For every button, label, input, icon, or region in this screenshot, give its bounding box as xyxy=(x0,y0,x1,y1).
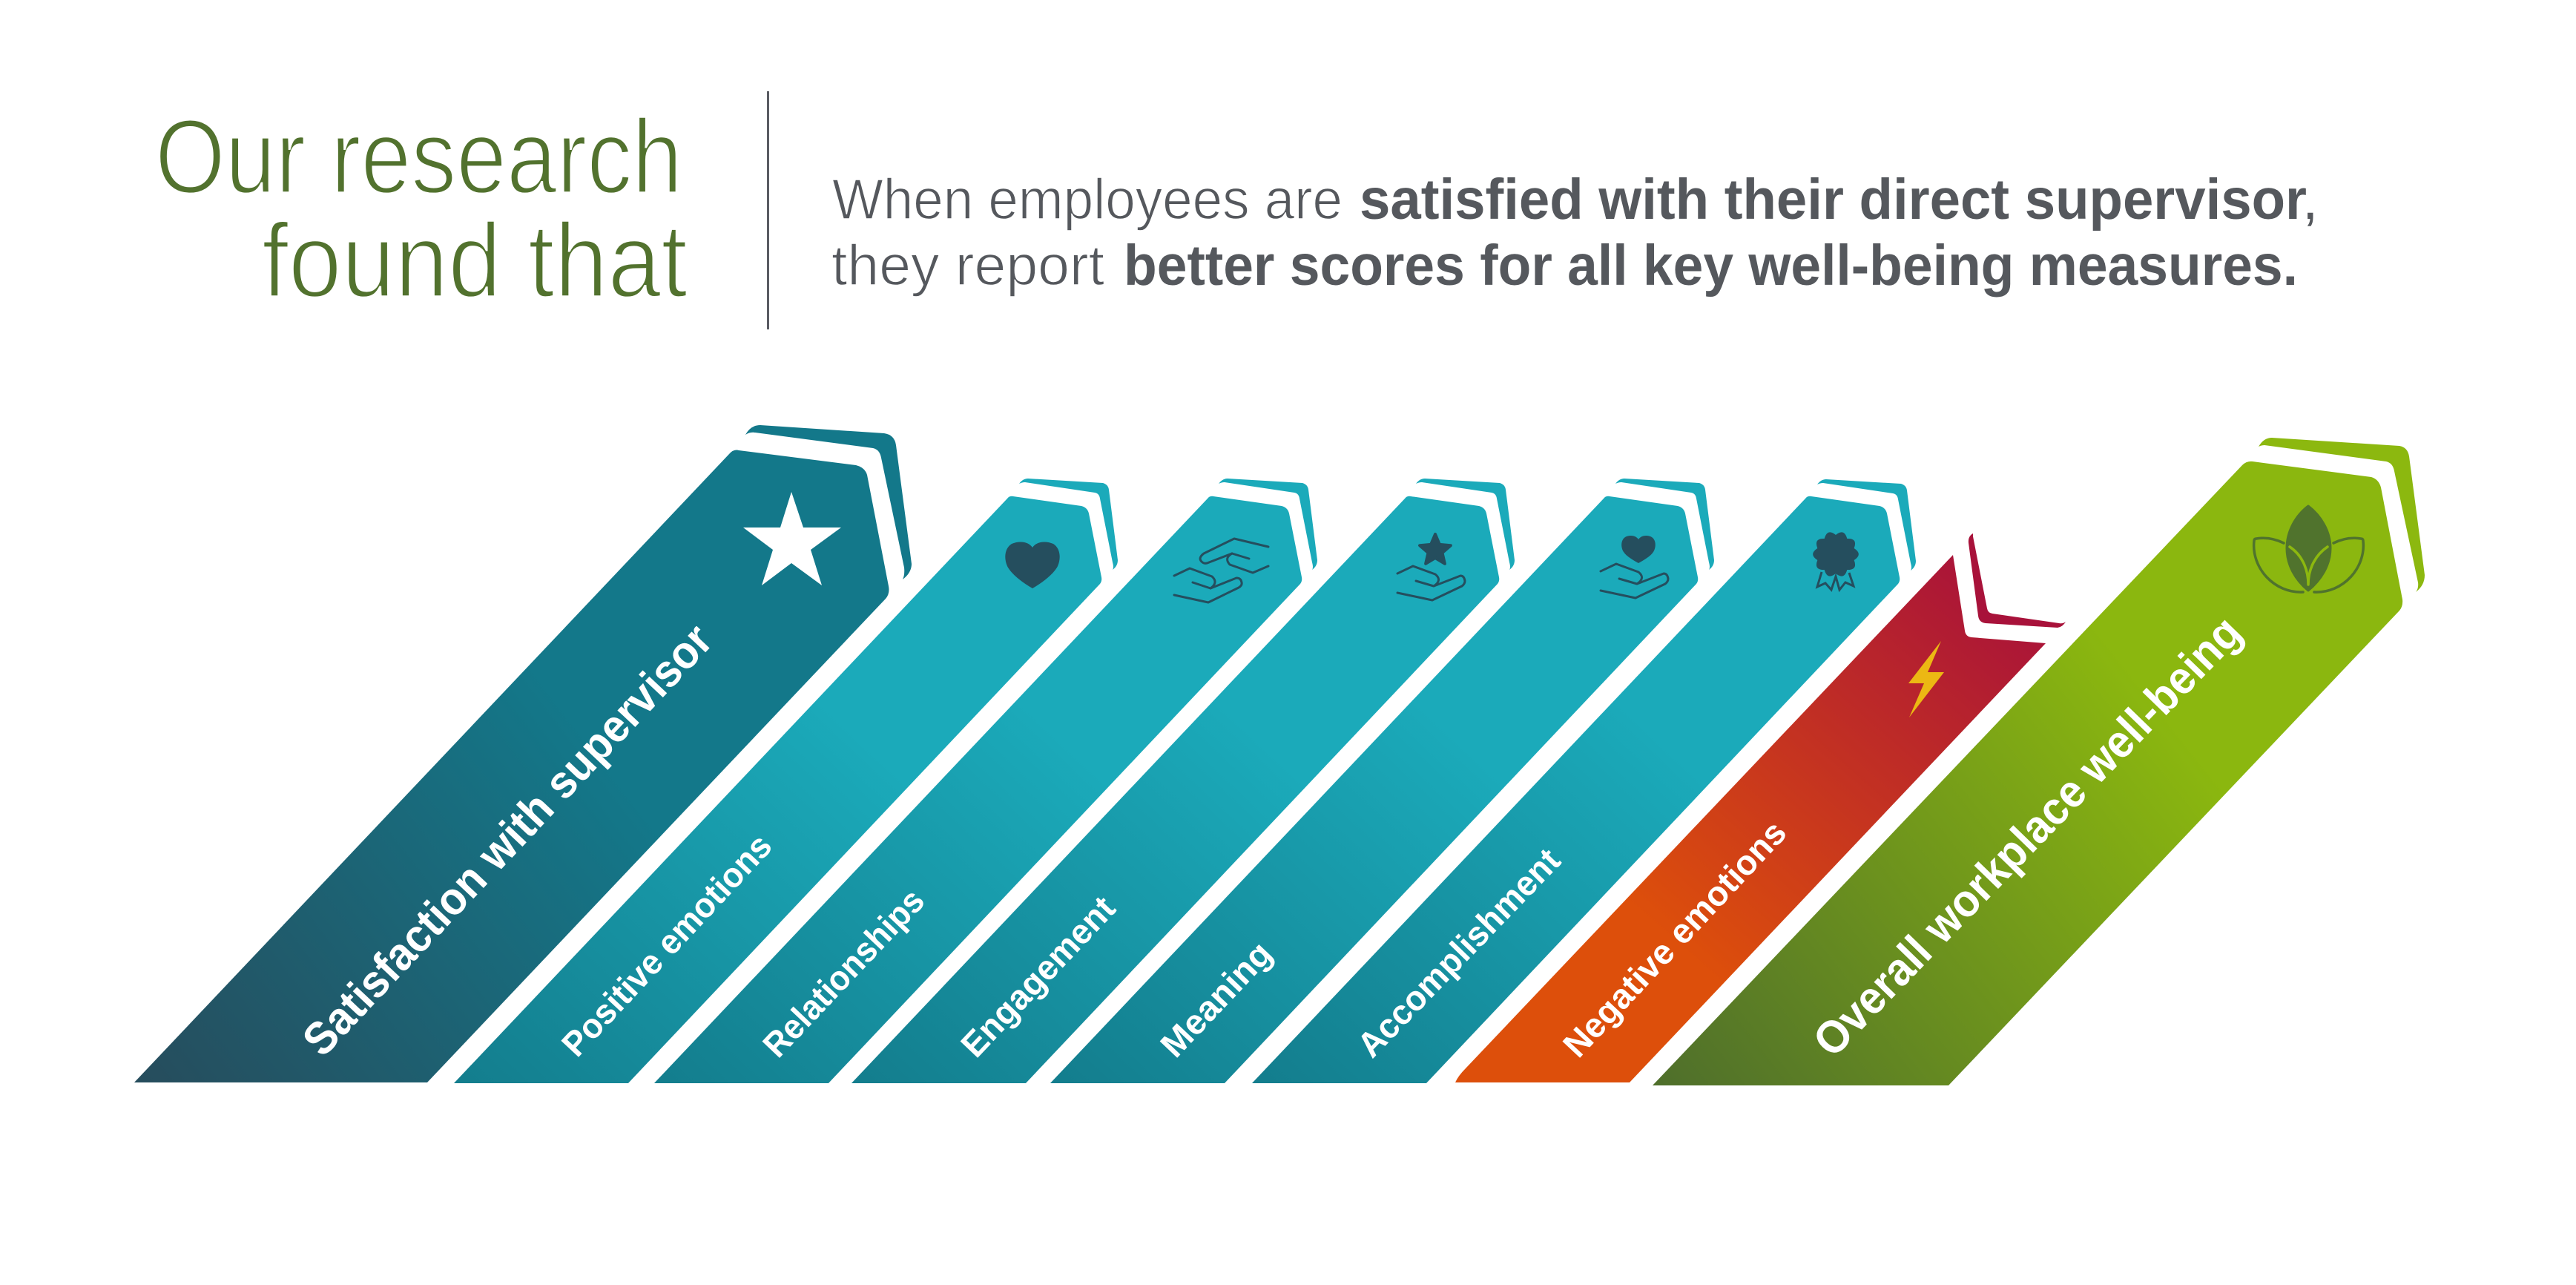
accent tab xyxy=(1969,533,2066,628)
bar: Satisfaction with supervisor xyxy=(134,425,912,1082)
bar shape xyxy=(1252,496,1900,1083)
divider xyxy=(767,91,769,329)
accent tab xyxy=(745,425,912,579)
bar shape xyxy=(454,496,1101,1083)
label: Negative emotions xyxy=(1555,812,1793,1065)
accent tab xyxy=(1219,479,1317,570)
intro text: , xyxy=(2302,168,2318,231)
intro text: they report xyxy=(831,234,1104,298)
icon: lightning bolt xyxy=(1908,641,1944,717)
bar: Positive emotions xyxy=(454,479,1118,1083)
label: Positive emotions xyxy=(554,826,780,1064)
icon: handshake xyxy=(1174,539,1268,602)
intro text: satisfied with their direct supervisor xyxy=(1360,168,2307,231)
label: Relationships xyxy=(755,881,932,1065)
bar: Relationships xyxy=(654,479,1317,1083)
intro text: When employees are xyxy=(832,168,1343,231)
bar shape xyxy=(1653,461,2402,1085)
label: Meaning xyxy=(1153,933,1279,1065)
intro text: better scores for all key well-being measures. xyxy=(1124,234,2298,298)
bar: Engagement xyxy=(851,479,1515,1083)
bar: Overall workplace well-being xyxy=(1653,438,2425,1085)
icon: leaves xyxy=(2254,506,2363,592)
accent tab xyxy=(1817,479,1916,571)
icon: hand with heart xyxy=(1601,536,1668,598)
bar shape xyxy=(1050,496,1698,1083)
accent tab xyxy=(1019,479,1118,570)
accent tab xyxy=(1615,479,1714,570)
title: Our research xyxy=(155,98,682,216)
icon: award rosette xyxy=(1813,532,1859,590)
label: Satisfaction with supervisor xyxy=(293,614,722,1066)
bar: Accomplishment xyxy=(1252,479,1916,1083)
intro text xyxy=(831,168,2318,298)
title: found that xyxy=(262,202,688,320)
label: Engagement xyxy=(953,888,1123,1065)
bar shape xyxy=(851,496,1499,1083)
bar: Negative emotions xyxy=(1455,533,2066,1082)
bar shape xyxy=(1455,555,2046,1082)
bar shape xyxy=(654,496,1302,1083)
bar: Meaning xyxy=(1050,479,1714,1083)
accent tab xyxy=(2259,438,2425,592)
icon: heart xyxy=(1005,542,1060,588)
icon: star xyxy=(743,492,841,585)
title xyxy=(155,98,688,320)
label: Accomplishment xyxy=(1349,840,1568,1065)
bar shape xyxy=(134,450,889,1082)
label: Overall workplace well-being xyxy=(1804,606,2252,1067)
icon: hand with star xyxy=(1397,534,1465,600)
accent tab xyxy=(1416,479,1515,570)
